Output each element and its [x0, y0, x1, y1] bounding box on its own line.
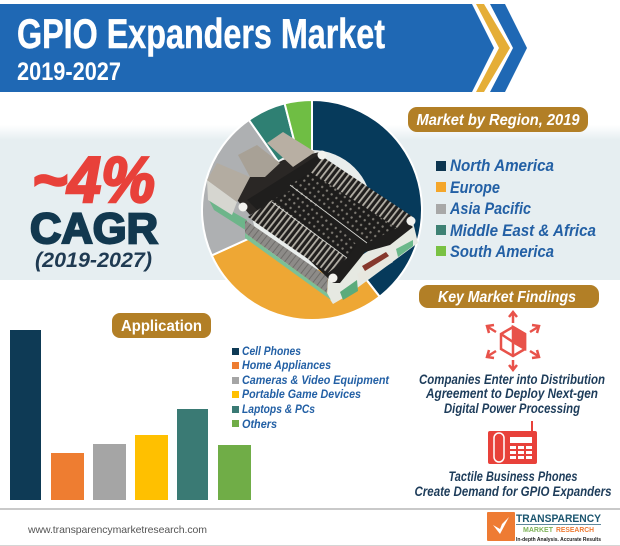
USB port 1	[207, 163, 250, 202]
logo: RESEARCH	[556, 527, 594, 534]
black top layer	[247, 155, 413, 283]
legend: application: Others	[242, 419, 277, 431]
block outlines	[272, 185, 367, 258]
pill: application	[112, 313, 211, 338]
legend: application: Cameras & Video Equipment	[242, 375, 390, 387]
subtitle: 2019-2027	[17, 58, 121, 86]
GPIO expander board image	[207, 132, 418, 304]
USB port front	[207, 180, 237, 215]
terminal block 2	[290, 172, 397, 243]
legend: regions	[436, 156, 596, 261]
pill: key market findings	[419, 285, 599, 308]
green edge, lower	[245, 233, 331, 300]
icon: cube with arrows	[487, 312, 539, 370]
front side pins	[248, 200, 347, 273]
text: finding 1: Digital Power Processing	[444, 401, 581, 416]
logo wordmark: TRANSPARENCY	[516, 513, 602, 525]
header block, lower	[245, 220, 328, 293]
legend: application	[232, 346, 390, 431]
text: finding 2	[414, 469, 612, 499]
pill: market by region: Market by Region, 2019	[416, 112, 580, 129]
pill: key market findings: Key Market Findings	[438, 289, 576, 306]
CAGR callout: ~4%	[32, 143, 155, 216]
connector	[357, 255, 393, 283]
title banner	[0, 4, 527, 92]
legend: regions: Europe	[450, 178, 500, 197]
legend: application: Home Appliances	[242, 360, 331, 372]
background band	[0, 125, 620, 280]
logo mark	[487, 512, 515, 541]
logo: In-depth Analysis. Accurate Results	[516, 537, 601, 543]
title: GPIO Expanders Market	[17, 10, 385, 57]
legend: application: Portable Game Devices	[242, 389, 361, 401]
legend: regions: Asia Pacific	[449, 199, 531, 218]
USB port 2	[238, 145, 280, 177]
legend: application: Laptops & PCs	[242, 404, 315, 416]
text: finding 2: Tactile Business Phones	[448, 469, 578, 484]
legend: regions: North America	[450, 156, 554, 175]
icon: business phone	[488, 421, 537, 464]
ethernet port	[267, 132, 315, 167]
terminal block 1	[272, 187, 357, 258]
rear side pins	[310, 157, 413, 228]
pill: market by region	[408, 107, 588, 132]
CAGR callout: (2019-2027)	[35, 249, 152, 272]
pill: application: Application	[121, 318, 202, 335]
legend: regions: South America	[450, 242, 554, 261]
logo	[487, 512, 602, 543]
legend: regions: Middle East & Africa	[450, 221, 596, 240]
text: finding 1	[419, 372, 605, 416]
green patches	[340, 280, 358, 300]
logo: MARKET	[523, 527, 554, 534]
footer rules	[0, 508, 620, 546]
text: finding 1: Agreement to Deploy Next-gen	[425, 386, 598, 401]
CAGR callout	[30, 143, 158, 272]
CAGR callout: CAGR	[30, 205, 158, 253]
donut chart: market by region	[202, 100, 422, 320]
bar chart: application	[10, 330, 251, 500]
dark gap behind ports	[237, 152, 320, 215]
green edge, left	[208, 198, 247, 231]
footer url: www.transparencymarketresearch.com	[27, 524, 207, 536]
mounting holes	[238, 202, 248, 212]
legend: application: Cell Phones	[242, 346, 301, 358]
right white frame	[327, 222, 418, 304]
